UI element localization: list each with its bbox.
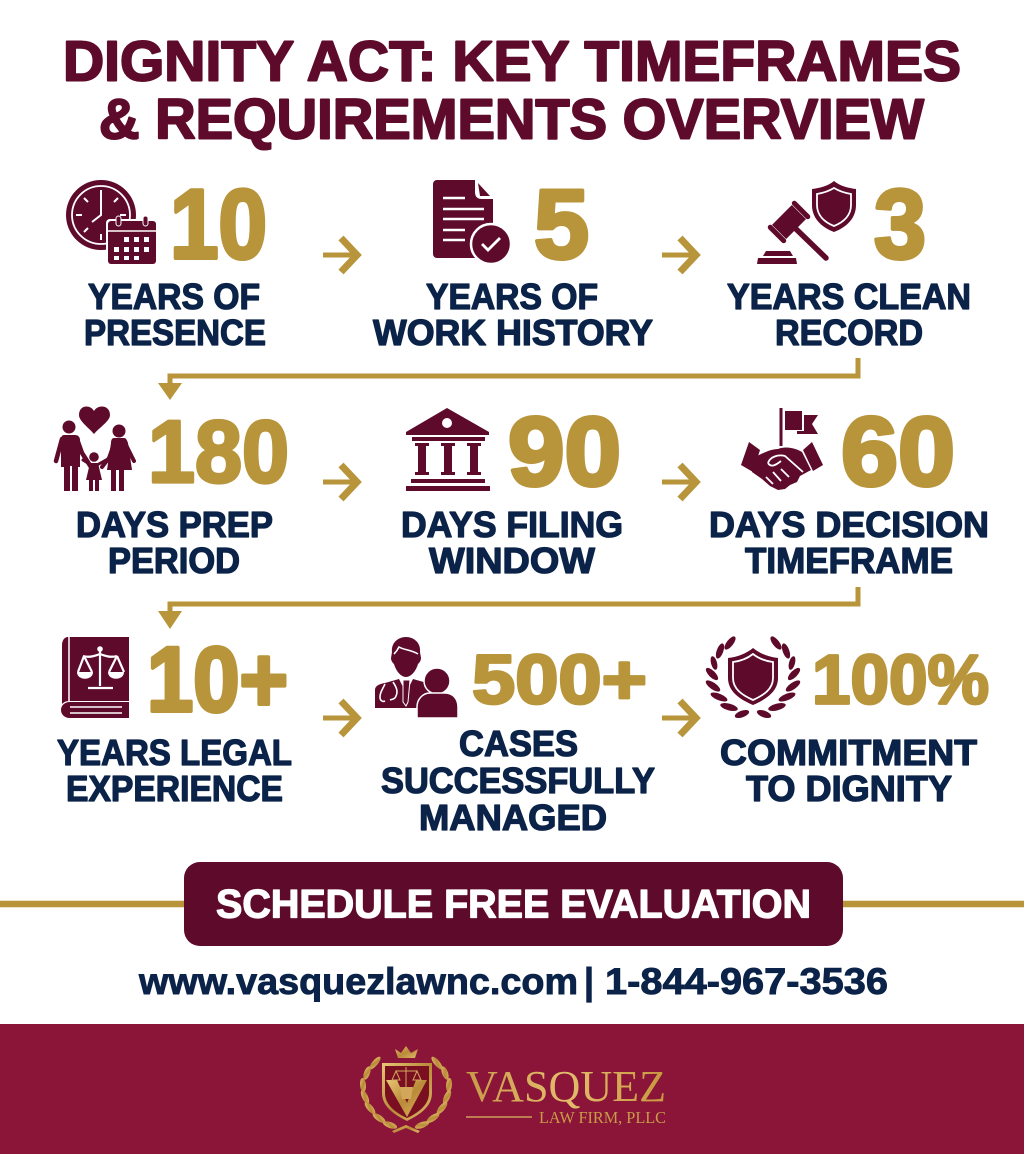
footer logo bbox=[359, 1046, 666, 1133]
stat: 5 years of work history bbox=[373, 169, 653, 353]
label bbox=[84, 276, 266, 353]
label: YEARS CLEAN bbox=[727, 276, 971, 317]
title bbox=[63, 30, 961, 152]
call to action button: SCHEDULE FREE EVALUATION bbox=[216, 882, 811, 926]
shield crest bbox=[382, 1063, 432, 1121]
icon: courthouse bbox=[406, 408, 490, 491]
number: 10 bbox=[170, 169, 267, 279]
stat: 60 days decision timeframe bbox=[709, 397, 989, 581]
title: & REQUIREMENTS OVERVIEW bbox=[99, 88, 924, 152]
label: PERIOD bbox=[108, 540, 240, 581]
label: COMMITMENT bbox=[720, 732, 977, 773]
icon: professional and client bbox=[375, 637, 458, 718]
icon: clock and calendar bbox=[66, 180, 157, 266]
icon: family with heart bbox=[56, 406, 134, 491]
stat: 180 days prep period bbox=[56, 402, 289, 581]
label: DAYS DECISION bbox=[709, 504, 989, 545]
label: DAYS PREP bbox=[76, 504, 273, 545]
icon: document with check bbox=[433, 180, 511, 264]
laurel wreath bbox=[359, 1055, 453, 1133]
label: YEARS OF bbox=[88, 276, 260, 317]
arrow bbox=[662, 238, 696, 272]
number: 90 bbox=[508, 397, 621, 506]
stat: 10+ years legal experience bbox=[57, 629, 292, 809]
icon: gavel and shield bbox=[757, 181, 856, 264]
contact line: www.vasquezlawnc.com bbox=[138, 961, 578, 1002]
label: TIMEFRAME bbox=[745, 540, 953, 581]
label: SUCCESSFULLY bbox=[381, 760, 655, 801]
label bbox=[57, 732, 292, 809]
crown bbox=[395, 1046, 418, 1058]
label: WINDOW bbox=[429, 540, 595, 581]
number: 10+ bbox=[147, 629, 288, 731]
connector arrow: row 2 to row 3 bbox=[158, 587, 858, 629]
firm subtitle: LAW FIRM, PLLC bbox=[539, 1108, 666, 1127]
arrow bbox=[662, 701, 696, 735]
call to action button bbox=[184, 862, 843, 946]
connector arrow: row 1 to row 2 bbox=[158, 358, 858, 400]
number: 100% bbox=[812, 640, 989, 718]
icon: handshake with flag bbox=[741, 408, 823, 490]
arrow bbox=[323, 238, 357, 272]
title: DIGNITY ACT: KEY TIMEFRAMES bbox=[63, 30, 961, 94]
label bbox=[401, 504, 623, 581]
stat: 90 days filing window bbox=[401, 397, 623, 581]
label: CASES bbox=[459, 723, 578, 764]
stat: 500+ cases successfully managed bbox=[375, 637, 655, 838]
contact line bbox=[138, 961, 888, 1003]
label bbox=[727, 276, 971, 353]
label: TO DIGNITY bbox=[746, 768, 952, 809]
stat: 100% commitment to dignity bbox=[704, 635, 989, 809]
label: YEARS LEGAL bbox=[57, 732, 292, 773]
label: WORK HISTORY bbox=[373, 312, 653, 353]
label: RECORD bbox=[775, 312, 923, 353]
icon: shield with laurel bbox=[704, 635, 802, 720]
label: DAYS FILING bbox=[401, 504, 623, 545]
label bbox=[373, 276, 653, 353]
contact line: 1-844-967-3536 bbox=[605, 961, 888, 1002]
label: PRESENCE bbox=[84, 312, 266, 353]
number: 180 bbox=[148, 402, 289, 501]
number: 5 bbox=[534, 169, 589, 279]
number: 60 bbox=[841, 397, 955, 506]
label: YEARS OF bbox=[426, 276, 598, 317]
arrow bbox=[323, 701, 357, 735]
arrow bbox=[323, 465, 357, 499]
label: MANAGED bbox=[419, 797, 607, 838]
number: 500+ bbox=[472, 640, 647, 718]
footer band bbox=[0, 1024, 1024, 1154]
arrow bbox=[662, 465, 696, 499]
label: EXPERIENCE bbox=[66, 768, 283, 809]
icon: law book with scales bbox=[61, 637, 129, 718]
stat: 3 years clean record bbox=[727, 169, 971, 353]
firm name: VASQUEZ bbox=[466, 1062, 666, 1111]
label bbox=[76, 504, 273, 581]
label bbox=[709, 504, 989, 581]
contact line: | bbox=[584, 961, 594, 1003]
label bbox=[381, 723, 655, 838]
stat: 10 years of presence bbox=[66, 169, 267, 353]
label bbox=[720, 732, 977, 809]
number: 3 bbox=[874, 169, 926, 279]
